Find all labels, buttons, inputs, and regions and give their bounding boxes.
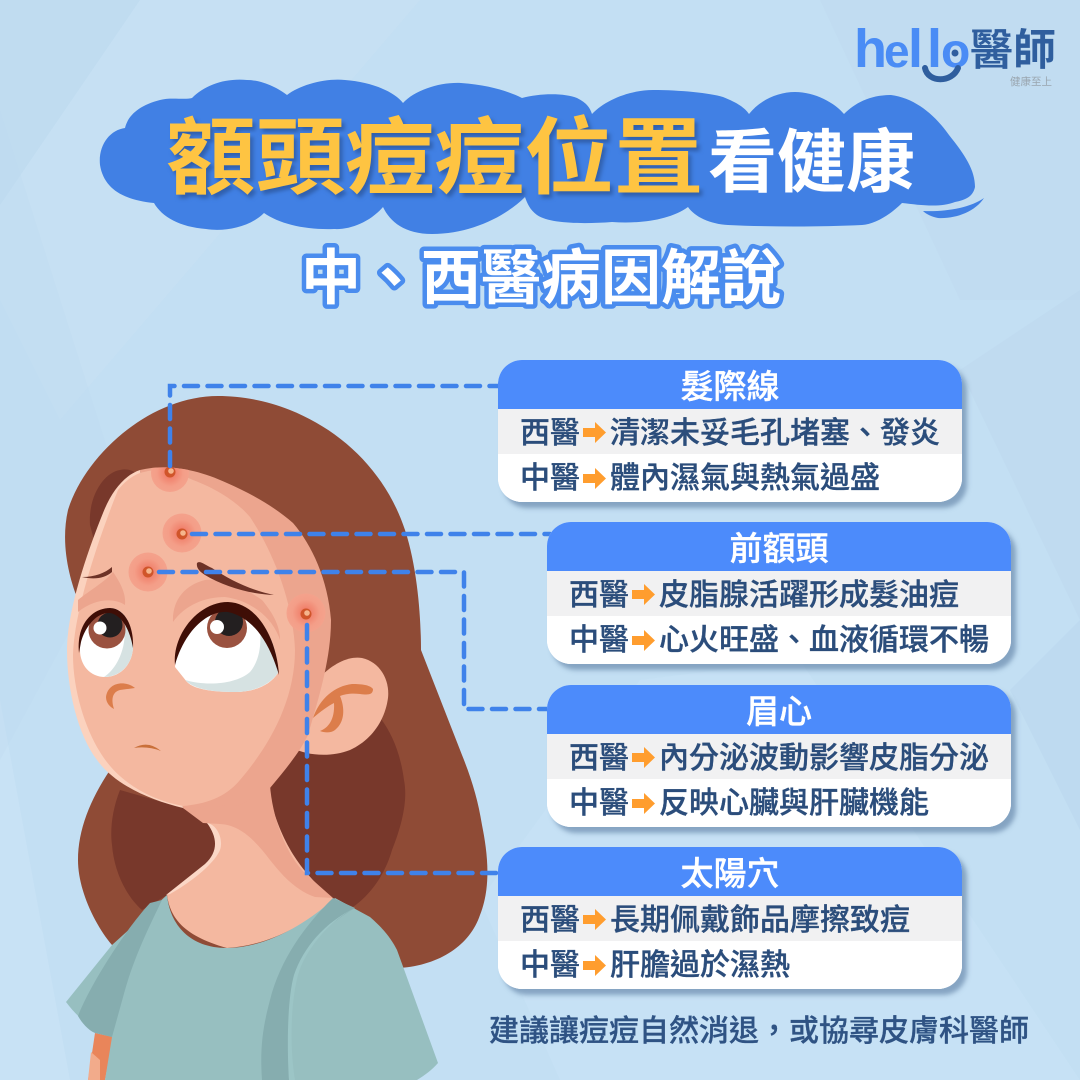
title: gold: 額頭痘痘位置	[166, 112, 703, 205]
row: chinese: 中醫	[569, 624, 629, 657]
right eye	[175, 602, 279, 692]
row: western	[498, 896, 962, 941]
subtitle: 中、西醫病因解說	[301, 245, 781, 312]
row: chinese: 中醫	[569, 787, 629, 820]
heading	[547, 685, 1011, 734]
row: western: 內分泌波動影響皮脂分泌	[659, 742, 989, 775]
neck highlight	[166, 823, 221, 895]
row: chinese: 體內濕氣與熱氣過盛	[610, 462, 880, 495]
pimple: between brows	[128, 552, 168, 592]
row: western: 清潔未妥毛孔堵塞、發炎	[610, 417, 940, 450]
logo: hello wordmark: l	[927, 19, 942, 79]
heading	[547, 522, 1011, 571]
right brow	[197, 562, 274, 595]
character: girl illustration	[65, 384, 552, 1080]
logo: tagline: 健康至上	[1010, 75, 1052, 88]
shirt folds	[78, 900, 162, 1037]
hair shadow right	[270, 715, 405, 907]
row: chinese: 心火旺盛、血液循環不暢	[659, 624, 989, 657]
neck	[167, 788, 335, 948]
logo: hello wordmark: e	[884, 25, 910, 77]
logo: stethoscope dot	[952, 50, 958, 56]
title: white: 看健康	[708, 124, 915, 201]
logo: 醫師: 醫師	[970, 27, 1056, 75]
connector lines	[159, 386, 550, 873]
heading: 前額頭	[730, 530, 828, 567]
row: western: 西醫	[520, 417, 580, 450]
row: western: 皮脂腺活躍形成髮油痘	[659, 579, 959, 612]
row: chinese: 肝膽過於濕熱	[610, 949, 790, 982]
heading	[498, 847, 962, 896]
row: chinese: 反映心臟與肝臟機能	[659, 787, 929, 820]
heading	[498, 360, 962, 409]
panel: 髮際線	[498, 360, 970, 510]
footer note: 建議讓痘痘自然消退，或協尋皮膚科醫師	[489, 1015, 1029, 1048]
left eye	[79, 608, 133, 677]
pimple: hairline	[151, 467, 189, 492]
logo: hello wordmark: l	[908, 19, 923, 79]
arm	[88, 1033, 113, 1080]
row: chinese	[547, 779, 1011, 827]
row: chinese	[498, 941, 962, 989]
title cloud	[100, 80, 984, 312]
row: western	[547, 571, 1011, 616]
row: chinese: 中醫	[520, 949, 580, 982]
temple hair	[90, 469, 138, 540]
panel: 前額頭	[547, 522, 1018, 672]
hair back	[65, 396, 487, 968]
left brow	[82, 567, 112, 578]
row: chinese	[498, 454, 962, 502]
inner ear	[313, 684, 373, 732]
mouth	[134, 745, 161, 751]
row: western: 西醫	[569, 742, 629, 775]
logo	[854, 19, 1056, 88]
logo: hello wordmark: h	[854, 19, 887, 79]
heading: 眉心	[746, 693, 812, 730]
heading: 太陽穴	[680, 855, 780, 892]
panel: 眉心	[547, 685, 1018, 836]
face skin	[73, 470, 295, 806]
logo: stethoscope	[925, 68, 958, 79]
face shade	[140, 467, 331, 808]
nose	[106, 683, 135, 709]
row: chinese	[547, 616, 1011, 664]
panel: 太陽穴	[498, 847, 970, 998]
row: western	[498, 409, 962, 454]
row: chinese: 中醫	[520, 462, 580, 495]
cloud swoosh	[923, 198, 984, 218]
pimple: temple	[286, 594, 326, 632]
heading: 髮際線	[680, 368, 780, 405]
hair shadow left	[111, 790, 225, 910]
ear	[293, 658, 388, 755]
neck shade	[183, 780, 333, 898]
face highlight	[67, 470, 183, 808]
eye sockets	[173, 580, 280, 640]
logo: hello wordmark: o	[941, 25, 970, 78]
shirt	[66, 895, 438, 1080]
row: western: 西醫	[569, 579, 629, 612]
row: western: 西醫	[520, 904, 580, 937]
row: western: 長期佩戴飾品摩擦致痘	[610, 904, 910, 937]
row: western	[547, 734, 1011, 779]
pimple: forehead	[162, 514, 202, 552]
